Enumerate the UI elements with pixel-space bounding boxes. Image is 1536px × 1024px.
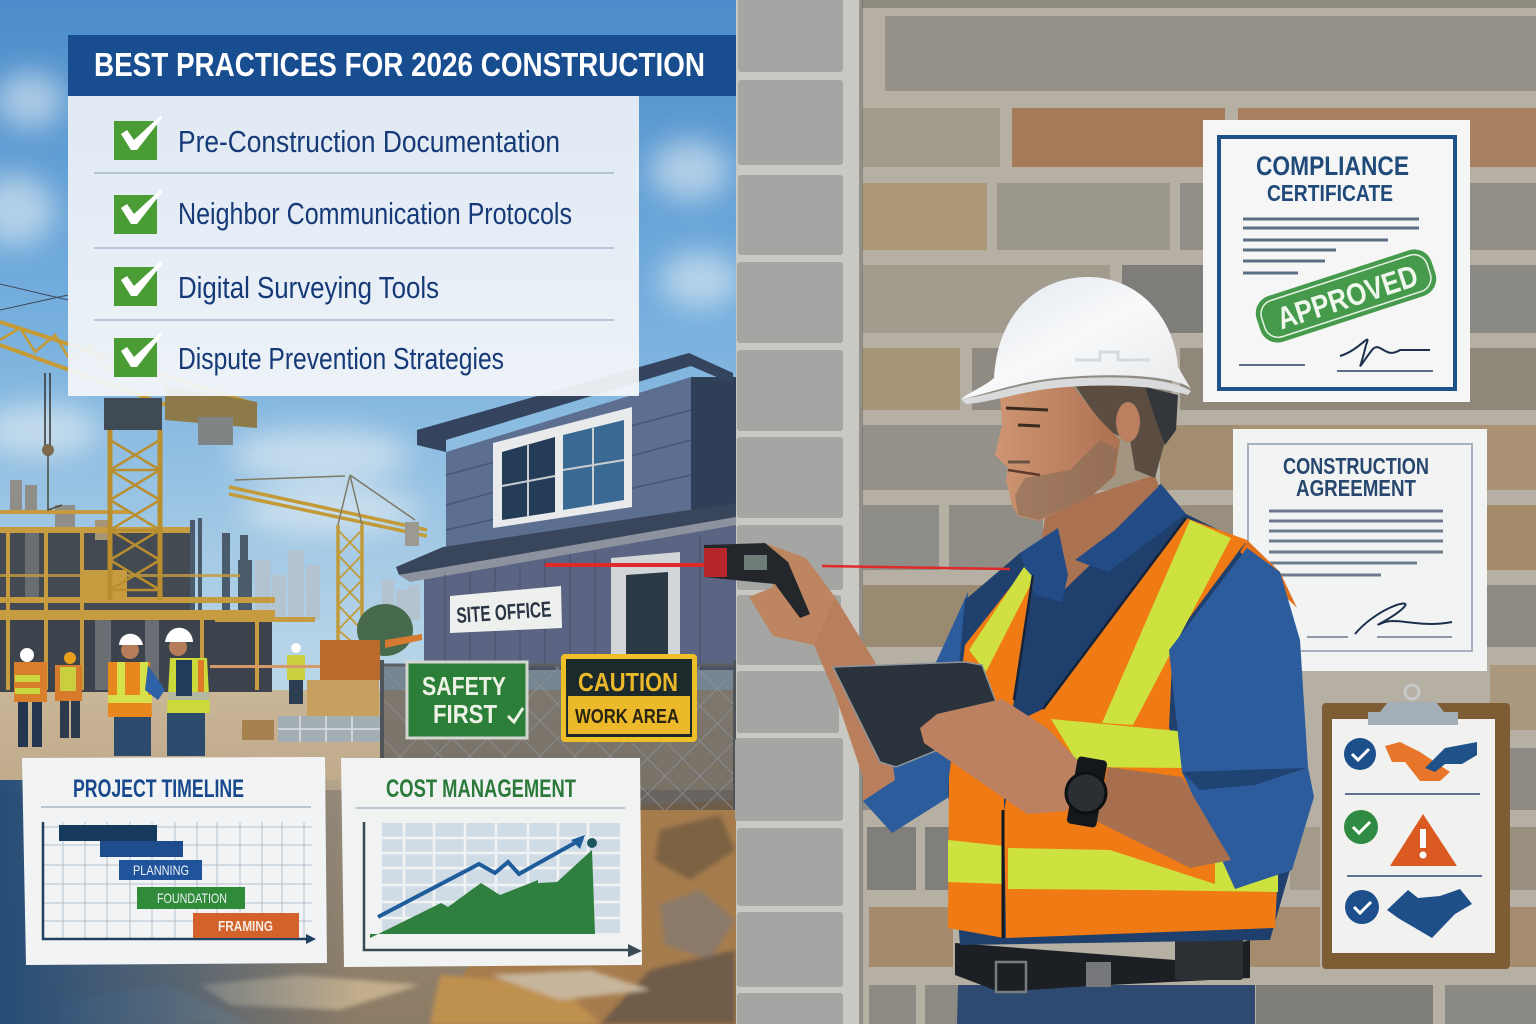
sign: safety first: SAFETY <box>422 671 506 701</box>
check item 1 <box>114 115 560 160</box>
sign: safety first <box>407 662 527 738</box>
panel: stone block column <box>735 0 863 1024</box>
sign: site office <box>450 586 562 633</box>
watch <box>1066 756 1108 828</box>
reflective strips <box>969 567 1034 672</box>
title banner <box>68 35 736 96</box>
hand on laser <box>749 543 835 645</box>
workers group <box>14 628 305 756</box>
document: compliance certificate: COMPLIANCE <box>1256 151 1409 181</box>
check icon 2 <box>1344 810 1378 844</box>
card: cost management <box>341 758 642 967</box>
bar: planning <box>119 860 202 880</box>
sign: site office: SITE OFFICE <box>456 596 552 628</box>
panel: best practices checklist <box>68 35 736 396</box>
chain link fence <box>380 660 736 810</box>
left forearm <box>814 597 895 801</box>
clipboard checklist <box>1322 685 1510 969</box>
document: construction agreement: CONSTRUCTION <box>1283 453 1429 479</box>
house: site office <box>396 353 736 670</box>
forearm holding tablet <box>1096 767 1231 868</box>
document: construction agreement: AGREEMENT <box>1296 475 1416 501</box>
barrier tape and orange equipment <box>210 634 422 680</box>
head <box>995 382 1168 521</box>
card: project timeline <box>22 757 327 965</box>
worker 2 <box>55 652 82 738</box>
sign: caution work area: CAUTION <box>578 667 678 697</box>
clipboard clip <box>1368 685 1458 725</box>
card: cost management: COST MANAGEMENT <box>386 775 576 803</box>
ground <box>0 690 740 1024</box>
trees <box>357 604 413 656</box>
vest right panel <box>1004 518 1278 938</box>
handshake icon blue <box>1387 889 1472 938</box>
distant city skyline <box>190 518 420 620</box>
bar: planning: PLANNING <box>133 862 189 878</box>
check icon 1 <box>1344 738 1376 770</box>
left sleeve <box>863 592 968 833</box>
handshake icon orange blue <box>1385 742 1477 781</box>
hand on tablet <box>920 699 1084 814</box>
worker 1 <box>14 648 47 747</box>
check item 4 <box>114 332 504 377</box>
sign: caution work area <box>561 654 697 742</box>
card: project timeline: PROJECT TIMELINE <box>73 775 244 803</box>
material pallets <box>242 680 380 742</box>
check item 2: Neighbor Communication Protocols <box>178 196 572 231</box>
panel: brick wall <box>858 0 1536 1024</box>
neck <box>1040 475 1160 592</box>
stamp: approved: APPROVED <box>1273 258 1422 336</box>
bar: foundation <box>137 887 245 909</box>
right sleeve <box>1169 548 1314 889</box>
worker 4 <box>165 628 210 756</box>
document: compliance certificate <box>1203 120 1470 402</box>
check icon 3 <box>1345 890 1379 924</box>
collar <box>1020 484 1186 602</box>
sign: caution work area: WORK AREA <box>575 706 679 728</box>
warning triangle <box>1390 814 1457 866</box>
panel: construction site background <box>0 0 740 1024</box>
bar: foundation: FOUNDATION <box>157 890 227 906</box>
sign: safety first: FIRST <box>433 699 497 729</box>
document: compliance certificate: CERTIFICATE <box>1267 180 1393 206</box>
shirt torso <box>948 484 1290 945</box>
check item 2 <box>114 189 572 234</box>
jeans <box>957 985 1255 1024</box>
laser beam <box>545 565 1010 569</box>
check item 4: Dispute Prevention Strategies <box>178 341 504 376</box>
belt and pouch <box>955 933 1250 992</box>
tablet <box>833 662 1004 767</box>
tower crane large <box>0 284 257 600</box>
check item 3 <box>114 261 439 306</box>
title banner: BEST PRACTICES FOR 2026 CONSTRUCTION <box>94 46 705 83</box>
hard hat <box>961 277 1191 445</box>
building under construction <box>0 480 315 692</box>
check item 1: Pre-Construction Documentation <box>178 124 560 159</box>
document: construction agreement <box>1233 429 1487 671</box>
check item 3: Digital Surveying Tools <box>178 270 439 305</box>
safety vest <box>948 518 1297 938</box>
laser measure device <box>704 543 810 618</box>
bar: framing <box>193 913 299 938</box>
worker figure <box>545 277 1314 1024</box>
bar: framing: FRAMING <box>218 918 273 935</box>
worker 5 <box>287 643 305 704</box>
tower crane small <box>229 475 427 650</box>
worker 3 <box>108 634 165 756</box>
vest left panel <box>948 570 1034 938</box>
